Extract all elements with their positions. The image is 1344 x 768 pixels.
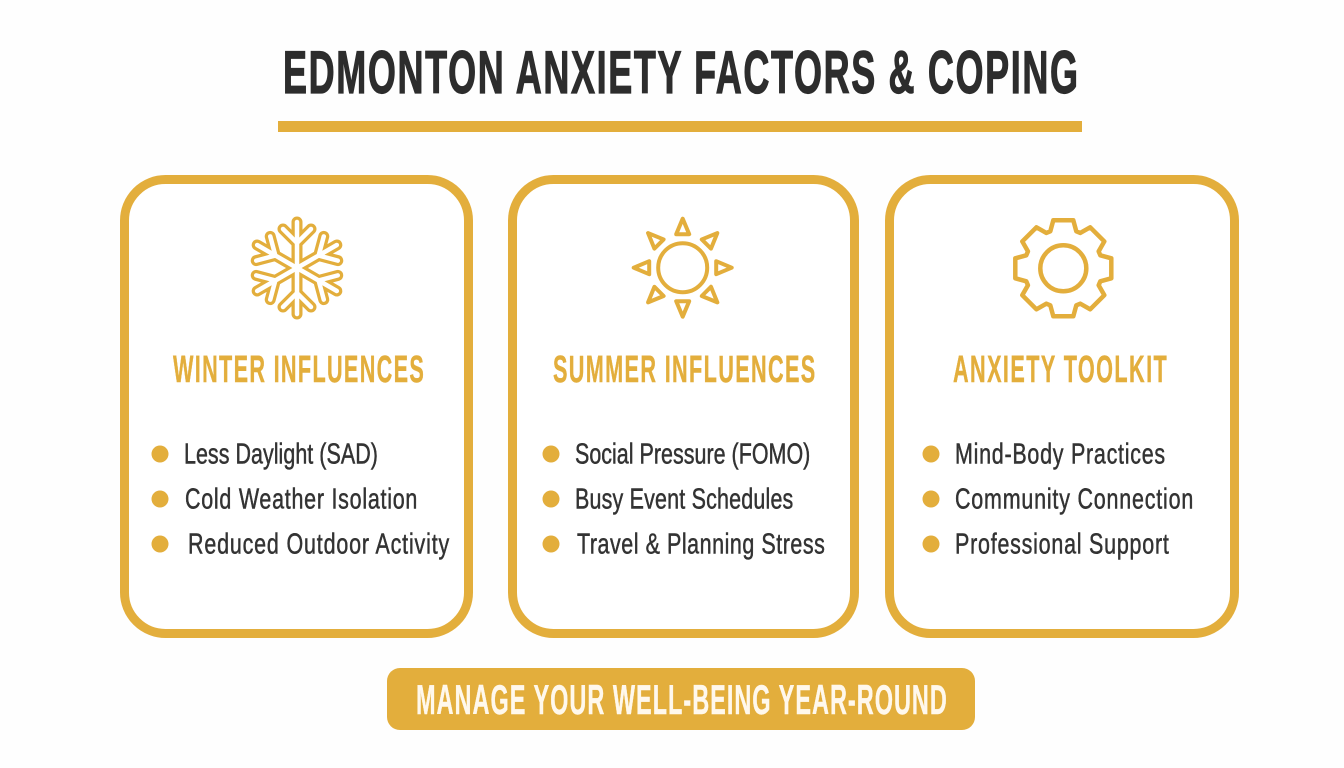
panel: anxiety toolkit [890, 180, 1234, 634]
list: winter factors: Cold Weather Isolation [185, 483, 417, 515]
banner [387, 668, 975, 730]
icon: gear [1015, 220, 1111, 316]
list: summer factors [542, 438, 825, 560]
panel: winter influences [124, 180, 468, 634]
list: summer factors: Travel & Planning Stress [577, 528, 825, 560]
heading: summer influences: SUMMER INFLUENCES [553, 348, 815, 391]
title underline [278, 121, 1082, 132]
list: winter factors: Less Daylight (SAD) [184, 438, 378, 470]
list: summer factors: Busy Event Schedules [575, 483, 793, 515]
list: coping tools: Community Connection [955, 483, 1193, 515]
icon: snowflake [250, 222, 344, 314]
list: winter factors: Reduced Outdoor Activity [188, 528, 449, 560]
list: coping tools: Professional Support [955, 528, 1169, 560]
list: summer factors: Social Pressure (FOMO) [575, 438, 810, 470]
heading: anxiety toolkit: ANXIETY TOOLKIT [953, 348, 1167, 391]
list: winter factors [152, 438, 449, 560]
list: coping tools [922, 438, 1193, 560]
heading: winter influences: WINTER INFLUENCES [173, 348, 424, 391]
list: coping tools: Mind-Body Practices [955, 438, 1165, 470]
icon: sun [634, 219, 732, 317]
banner text: MANAGE YOUR WELL-BEING YEAR-ROUND [416, 677, 947, 724]
title: EDMONTON ANXIETY FACTORS & COPING [283, 40, 1078, 106]
panel: summer influences [512, 180, 854, 634]
